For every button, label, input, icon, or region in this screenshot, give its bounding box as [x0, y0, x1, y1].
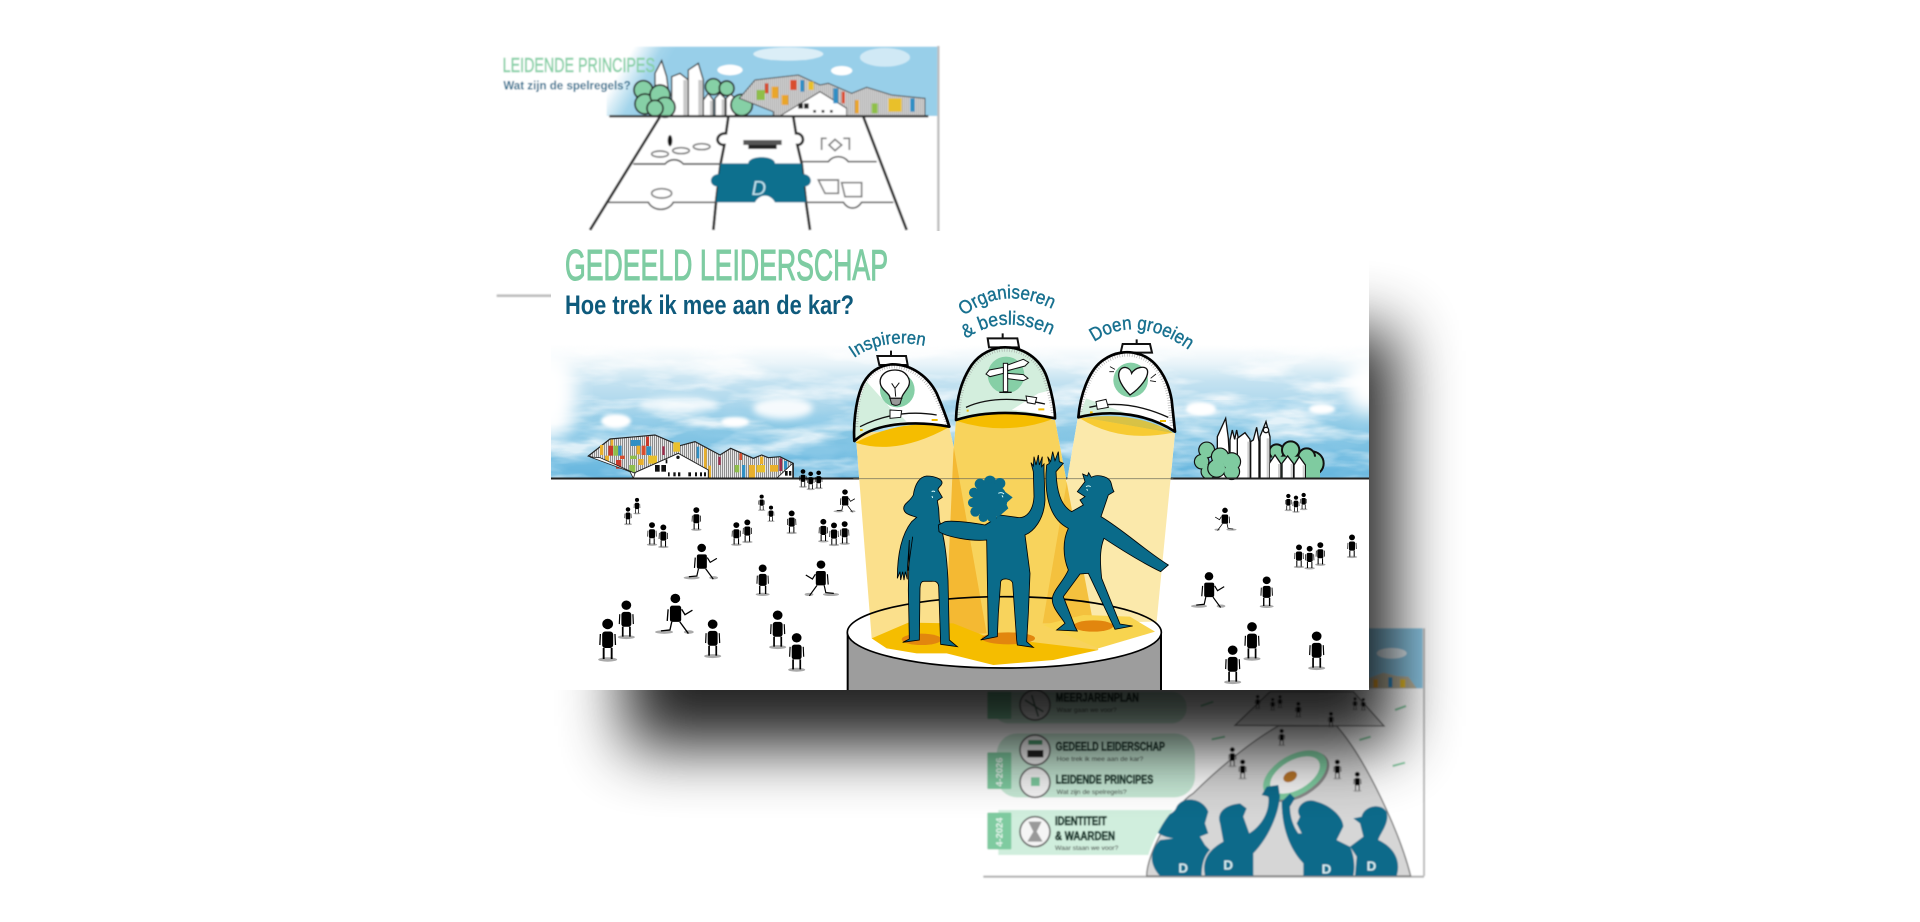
white house	[633, 453, 708, 478]
year tag labels: 4-2026	[995, 758, 1005, 787]
step circles	[1020, 690, 1050, 847]
title: GEDEELD LEIDERSCHAP	[565, 241, 888, 290]
crowd left	[598, 469, 856, 672]
colored facade panels	[600, 437, 787, 478]
teams on road	[1228, 695, 1366, 792]
heart icon	[1119, 367, 1148, 395]
dome light cone rim	[855, 425, 949, 447]
sky band	[607, 47, 937, 116]
dome light cone rim	[957, 414, 1054, 428]
label: inspireren: Inspireren	[848, 332, 926, 358]
grass tufts	[1201, 702, 1406, 766]
logos on figures: D	[1322, 861, 1332, 876]
dome outline	[1078, 352, 1175, 432]
medallion	[1255, 740, 1338, 812]
step sublabels: Waar staan we voor?	[1055, 845, 1119, 852]
label: organiseren: Organiseren	[959, 284, 1055, 314]
step labels: GEDEELD LEIDERSCHAP	[1056, 740, 1165, 754]
step labels: MEERJARENPLAN	[1056, 691, 1139, 705]
horizon line	[551, 478, 1369, 480]
dome outline	[854, 364, 949, 441]
gauge	[1089, 404, 1168, 417]
step sublabels: Waar gaan we voor?	[1057, 707, 1117, 714]
teal puzzle piece	[711, 157, 811, 202]
crowd right	[1191, 493, 1357, 684]
dome outline	[956, 347, 1055, 420]
step labels: LEIDENDE PRINCIPES	[1056, 772, 1153, 786]
sidebar year tags	[987, 692, 1011, 849]
spotlight dome: organiseren en beslissen	[956, 333, 1055, 428]
gauge	[860, 413, 937, 427]
back trees	[1269, 441, 1324, 478]
church shading	[1247, 438, 1305, 478]
spotlight dome: doen groeien	[1078, 339, 1175, 436]
figure: woman	[897, 476, 957, 647]
label: doen groeien: Doen groeien	[1088, 319, 1193, 350]
church and trees right	[1195, 418, 1324, 479]
step labels: & WAARDEN	[1055, 829, 1115, 843]
logos on figures: D	[1367, 859, 1377, 874]
figure: curly haired person	[938, 455, 1045, 647]
signpost icon	[986, 359, 1029, 392]
label: en beslissen: & beslissen	[962, 310, 1054, 338]
card subtitle: Wat zijn de spelregels?	[503, 78, 631, 92]
light pools on stage	[1043, 615, 1155, 648]
trees	[634, 79, 752, 117]
sky	[551, 352, 1369, 478]
foot shadows	[902, 620, 1113, 645]
figure: man	[1046, 452, 1168, 631]
puzzle icons	[652, 138, 862, 198]
step sublabels: Hoe trek ik mee aan de kar?	[1057, 756, 1144, 763]
spotlight dome: inspireren	[854, 351, 949, 447]
house windows	[798, 103, 833, 113]
neck	[1121, 339, 1152, 353]
logos on figures	[1178, 857, 1377, 876]
neck	[988, 333, 1019, 347]
stage rim	[847, 597, 1161, 668]
step circle glyphs	[1025, 695, 1043, 842]
dome body	[1078, 352, 1175, 432]
back card: bottom right overview	[983, 628, 1424, 877]
gauge	[966, 399, 1045, 407]
lightbulb icon	[880, 370, 909, 405]
clouds	[601, 397, 1335, 428]
dome light cone rim	[1080, 416, 1173, 436]
subtitle: Hoe trek ik mee aan de kar?	[565, 290, 854, 320]
church spires	[1217, 418, 1305, 478]
dome body	[854, 364, 949, 441]
main card shadow	[625, 330, 1395, 747]
spotlight beams	[856, 417, 1175, 650]
infographic: stacked cards	[496, 45, 1448, 878]
label: doen groeien	[1088, 319, 1193, 350]
logos on figures: D	[1178, 861, 1188, 876]
step sublabels	[1055, 707, 1144, 852]
team figures	[1152, 785, 1398, 876]
church shading	[683, 80, 724, 115]
horizon through beams	[853, 478, 1174, 480]
road	[1147, 726, 1411, 876]
step labels: IDENTITEIT	[1055, 814, 1107, 828]
letter on puzzle piece: D	[752, 178, 766, 200]
dome body	[956, 347, 1055, 420]
front trees	[1195, 443, 1240, 479]
neck	[877, 351, 908, 365]
step labels	[1055, 691, 1165, 843]
puzzle board	[590, 117, 907, 230]
stage cylinder	[848, 633, 1161, 693]
year tag labels	[995, 758, 1005, 847]
timeline pills	[993, 692, 1187, 723]
stage top	[848, 632, 1160, 668]
step sublabels: Wat zijn de spelregels?	[1057, 789, 1127, 796]
back card: leidende principes	[497, 46, 938, 296]
building left	[588, 435, 793, 478]
main card	[551, 231, 1369, 690]
colourful building	[739, 75, 925, 116]
year tag labels: 4-2024	[995, 817, 1005, 847]
building corner	[1368, 673, 1417, 688]
skyline church	[655, 61, 735, 116]
sky corner	[1368, 628, 1423, 688]
horizon	[609, 113, 928, 120]
card title: LEIDENDE PRINCIPES	[503, 55, 655, 77]
windows	[655, 456, 791, 476]
logos on figures: D	[1223, 857, 1233, 872]
road top	[1235, 692, 1384, 726]
stage with spotlights and team	[847, 417, 1175, 693]
